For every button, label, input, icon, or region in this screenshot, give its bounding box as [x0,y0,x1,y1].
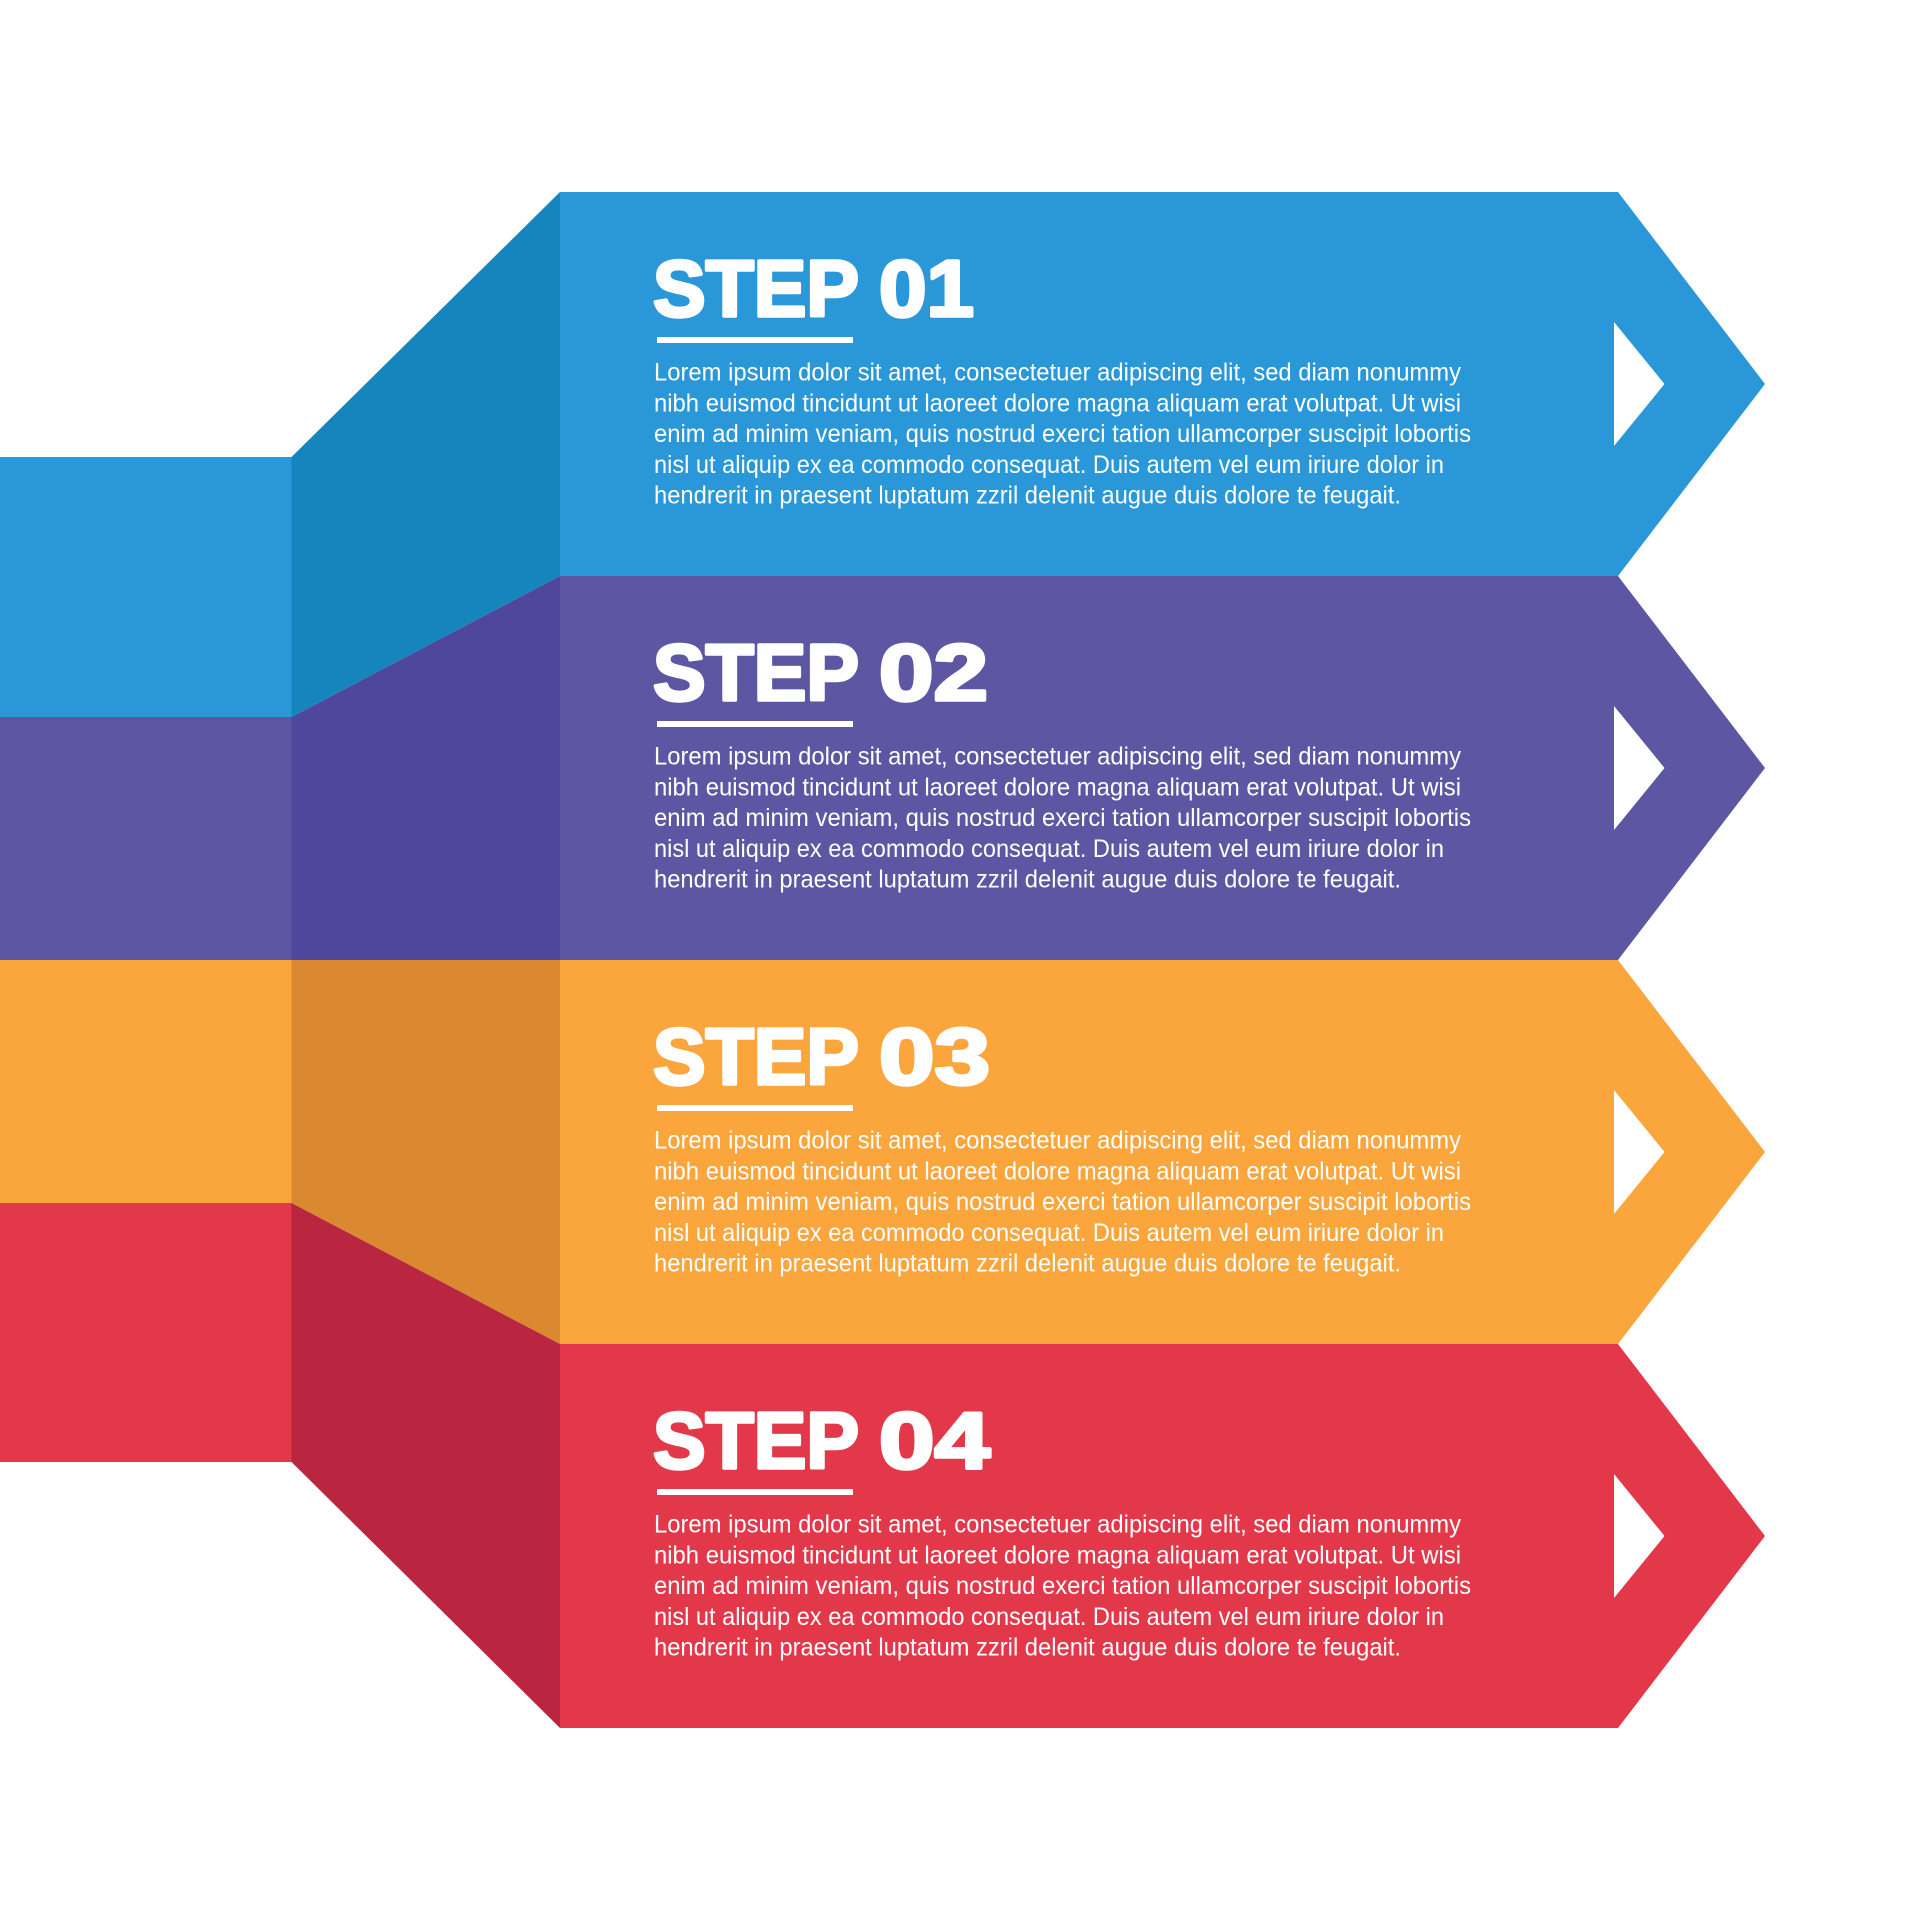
body text: Lorem ipsum dolor sit amet, consectetuer adipiscing elit, sed diam nonummy [654,359,1461,387]
panel: step 04 [0,1203,1765,1728]
heading [653,244,974,333]
body text [654,1127,1471,1278]
underline [657,721,853,727]
body text: nibh euismod tincidunt ut laoreet dolore magna aliquam erat volutpat. Ut wisi [654,773,1461,801]
body text: hendrerit in praesent luptatum zzril delenit augue duis dolore te feugait. [654,1634,1401,1662]
body text: enim ad minim veniam, quis nostrud exerci tation ullamcorper suscipit lobortis [654,804,1471,832]
fold [292,576,560,960]
body text: nibh euismod tincidunt ut laoreet dolore magna aliquam erat volutpat. Ut wisi [654,389,1461,417]
left band [0,717,292,960]
body text: nisl ut aliquip ex ea commodo consequat. Duis autem vel eum iriure dolor in [654,1219,1444,1247]
arrow body [560,192,1765,576]
body text [654,1511,1471,1662]
arrow body [560,960,1765,1344]
body text [654,743,1471,894]
body text: enim ad minim veniam, quis nostrud exerci tation ullamcorper suscipit lobortis [654,1188,1471,1216]
left band [0,960,292,1203]
arrow body [560,576,1765,960]
heading [653,1396,991,1485]
heading [653,628,988,717]
fold [292,960,560,1344]
heading: STEP [653,1012,859,1101]
body text: nisl ut aliquip ex ea commodo consequat. Duis autem vel eum iriure dolor in [654,835,1444,863]
left band [0,457,292,717]
icon: arrow triangle [1614,322,1664,446]
icon: arrow triangle [1614,706,1664,830]
panel: step 03 [0,960,1765,1344]
heading: STEP [653,1396,859,1485]
fold [292,1203,560,1728]
heading: 04 [879,1396,991,1485]
arrow body [560,1344,1765,1728]
fold [292,192,560,717]
body text: enim ad minim veniam, quis nostrud exerci tation ullamcorper suscipit lobortis [654,1572,1471,1600]
underline [657,1489,853,1495]
underline [657,1105,853,1111]
heading: STEP [653,244,859,333]
body text: nibh euismod tincidunt ut laoreet dolore magna aliquam erat volutpat. Ut wisi [654,1157,1461,1185]
body text: nisl ut aliquip ex ea commodo consequat. Duis autem vel eum iriure dolor in [654,451,1444,479]
left band [0,1203,292,1462]
underline [657,337,853,343]
body text: Lorem ipsum dolor sit amet, consectetuer adipiscing elit, sed diam nonummy [654,1511,1461,1539]
panel: step 02 [0,576,1765,960]
body text: Lorem ipsum dolor sit amet, consectetuer adipiscing elit, sed diam nonummy [654,1127,1461,1155]
heading: 01 [879,244,974,333]
body text: hendrerit in praesent luptatum zzril delenit augue duis dolore te feugait. [654,1250,1401,1278]
panel: step 01 [0,192,1765,717]
heading [653,1012,990,1101]
body text [654,359,1471,510]
body text: hendrerit in praesent luptatum zzril delenit augue duis dolore te feugait. [654,482,1401,510]
body text: Lorem ipsum dolor sit amet, consectetuer adipiscing elit, sed diam nonummy [654,743,1461,771]
body text: hendrerit in praesent luptatum zzril delenit augue duis dolore te feugait. [654,866,1401,894]
body text: nisl ut aliquip ex ea commodo consequat. Duis autem vel eum iriure dolor in [654,1603,1444,1631]
heading: 03 [879,1012,990,1101]
heading: 02 [879,628,988,717]
icon: arrow triangle [1614,1090,1664,1214]
heading: STEP [653,628,859,717]
body text: enim ad minim veniam, quis nostrud exerci tation ullamcorper suscipit lobortis [654,420,1471,448]
icon: arrow triangle [1614,1474,1664,1598]
body text: nibh euismod tincidunt ut laoreet dolore magna aliquam erat volutpat. Ut wisi [654,1541,1461,1569]
